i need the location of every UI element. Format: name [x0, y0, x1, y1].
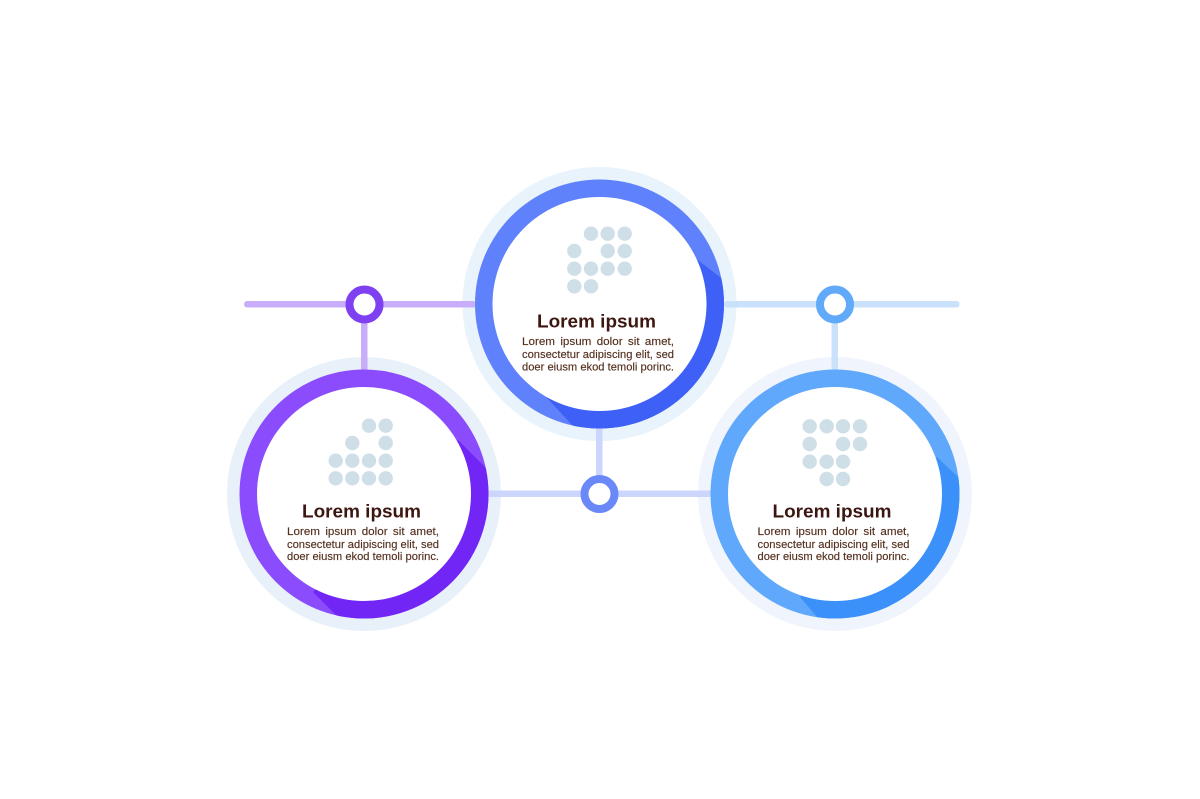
icon: left dot pattern [328, 418, 393, 485]
icon: top dot pattern [567, 226, 632, 293]
node: periwinkle [584, 479, 614, 509]
body text: right: consectetur adipiscing elit, sed [758, 539, 910, 551]
ring shadow: top [547, 260, 724, 428]
body text: top: consectetur adipiscing elit, sed [522, 349, 674, 361]
body text: top [522, 336, 674, 374]
halo: top circle [462, 167, 736, 441]
halo: right circle [698, 357, 972, 631]
body text: left: Lorem ipsum dolor sit amet, [287, 526, 439, 538]
ring: right [710, 370, 960, 618]
panel: left circle [240, 370, 488, 618]
inner disc: right [728, 387, 942, 601]
heading: right: Lorem ipsum [772, 500, 892, 522]
node: light blue [820, 290, 850, 320]
node: purple [350, 290, 380, 320]
ring: left [240, 370, 488, 618]
panel: top circle [475, 180, 724, 428]
heading: top: Lorem ipsum [537, 310, 656, 332]
body text: right: doer eiusm ekod temoli porinc. [758, 551, 910, 563]
body text: left: consectetur adipiscing elit, sed [287, 539, 439, 551]
body text: left [287, 526, 439, 563]
ring shadow: left [313, 440, 488, 618]
body text: left: doer eiusm ekod temoli porinc. [287, 551, 439, 563]
infographic [227, 167, 972, 631]
body text: top: Lorem ipsum dolor sit amet, [522, 336, 674, 348]
body text: right [758, 526, 910, 563]
ring shadow: right [800, 457, 960, 618]
body text: right: Lorem ipsum dolor sit amet, [758, 526, 910, 538]
connector: light blue line [724, 301, 960, 372]
connector: purple line [244, 301, 476, 372]
body text: top: doer eiusm ekod temoli porinc. [522, 362, 674, 374]
inner disc: left [257, 387, 471, 601]
icon: right dot pattern [802, 419, 867, 486]
connector: periwinkle line [486, 426, 714, 497]
inner disc: top [492, 197, 706, 411]
panel: right circle [710, 370, 960, 618]
halo: left circle [227, 357, 501, 631]
ring: top [475, 180, 724, 428]
heading: left: Lorem ipsum [302, 500, 421, 522]
